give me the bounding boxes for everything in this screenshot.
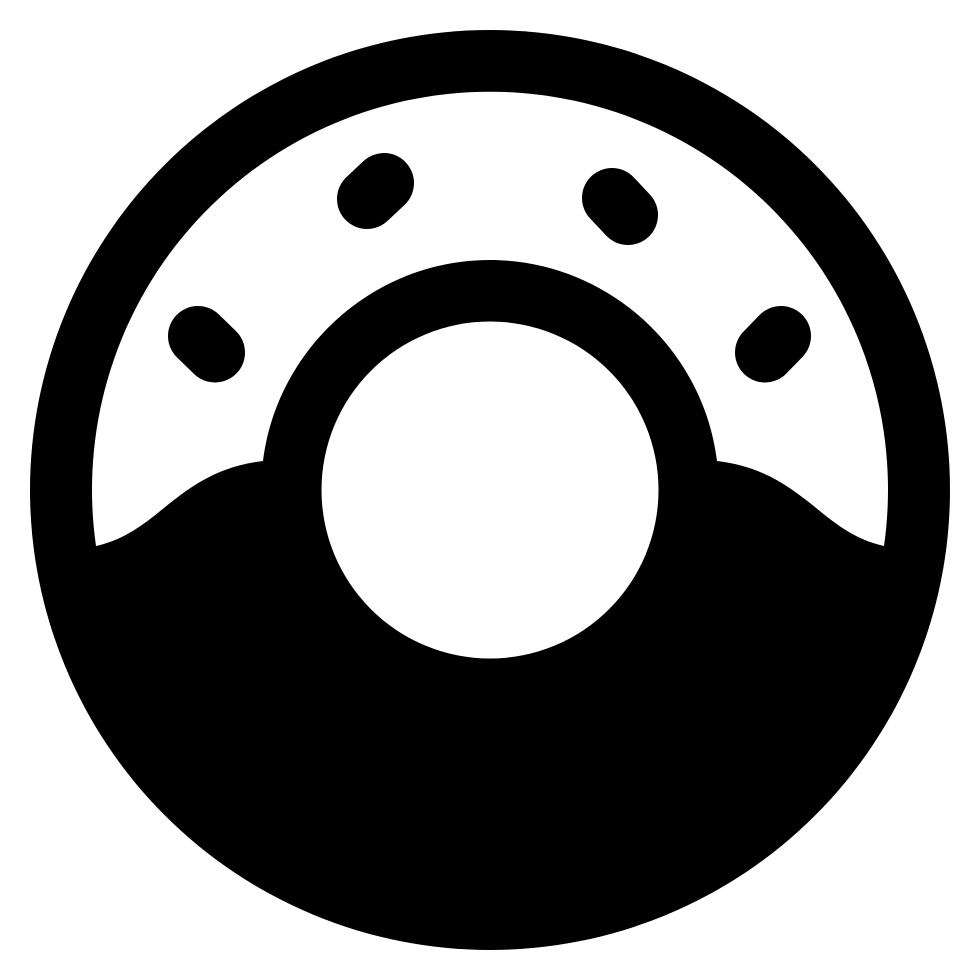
sprinkle: right	[765, 336, 781, 352]
sprinkle: top left	[367, 183, 384, 199]
sprinkle: left	[198, 336, 215, 352]
white frosting area	[92, 92, 888, 546]
donut hole	[322, 322, 658, 658]
sprinkle: top right	[612, 198, 628, 215]
